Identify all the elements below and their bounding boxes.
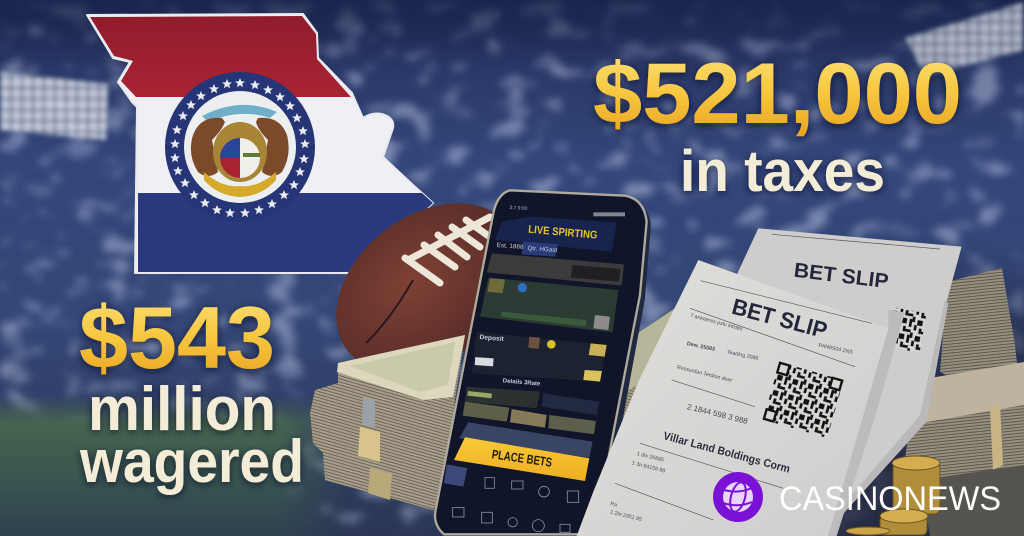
slip small text bbox=[610, 313, 854, 523]
place bets button bbox=[454, 437, 589, 481]
tabs: Est. 1888 bbox=[497, 242, 524, 251]
back QR code bbox=[887, 307, 927, 353]
amount: $543: $543 bbox=[79, 288, 275, 387]
slip small text: 1 dw 26895 bbox=[636, 451, 664, 464]
top bill bbox=[337, 335, 465, 400]
slip small text: Ra bbox=[610, 501, 618, 509]
smartphone bbox=[435, 190, 651, 534]
slip small text: PAN9S04 2NS bbox=[818, 343, 854, 356]
bet bar bbox=[459, 422, 593, 458]
app title: LIVE SPIRTING bbox=[528, 224, 598, 242]
eagle left bbox=[191, 118, 225, 176]
status bar bbox=[509, 205, 625, 216]
company name: Villar Land Boldings Corm bbox=[662, 430, 791, 476]
football bbox=[303, 168, 553, 408]
stadium light right bbox=[905, 2, 1024, 76]
eagle right bbox=[256, 118, 289, 176]
tabs: Qtr. HGast bbox=[527, 245, 558, 254]
place bets button: PLACE BETS bbox=[491, 447, 553, 470]
front bet slip bbox=[577, 260, 905, 536]
heading: back BET SLIP: BET SLIP bbox=[793, 259, 890, 293]
slip small text: Ressurdan Terdion deer bbox=[676, 364, 733, 384]
slip small text: Dew. 25083 bbox=[686, 341, 715, 353]
back bet slip bbox=[680, 228, 962, 536]
stadium light left bbox=[0, 72, 108, 140]
tabs bbox=[497, 242, 558, 257]
state seal bbox=[165, 72, 315, 222]
QR code bbox=[763, 362, 844, 438]
label: wagered: wagered bbox=[79, 428, 304, 495]
left stack of money bbox=[310, 335, 465, 510]
Missouri state flag map bbox=[87, 14, 438, 273]
ring of stars bbox=[170, 78, 310, 217]
crest gold band bbox=[213, 122, 267, 182]
seam bbox=[366, 280, 413, 343]
odds row bbox=[487, 253, 624, 286]
slip lines bbox=[615, 281, 872, 520]
label: in taxes: in taxes bbox=[680, 139, 885, 204]
heading: BET SLIP: BET SLIP bbox=[729, 293, 830, 343]
laces bbox=[405, 217, 490, 283]
slip small text: 1 2ln 2351 95 bbox=[610, 509, 642, 523]
status bar: 3:7 9:00 bbox=[509, 205, 528, 212]
slip small text: 2 1844 598 3 988 bbox=[686, 402, 749, 426]
helmet arc bbox=[202, 105, 277, 122]
featured match panel bbox=[480, 278, 618, 332]
bottom navigation bbox=[444, 464, 579, 532]
CasinoNews logo bbox=[713, 472, 1001, 522]
wordmark: CASINONEWS bbox=[779, 480, 1001, 518]
bundle straps bbox=[358, 427, 380, 462]
gold scroll bbox=[204, 172, 276, 197]
smartphone: Details 3Rate bbox=[502, 378, 541, 388]
grid panel bbox=[472, 332, 607, 382]
gold coin stacks bbox=[846, 456, 940, 535]
right-of-phone bills bbox=[620, 305, 690, 430]
olive buttons bbox=[463, 402, 509, 422]
label: million: million bbox=[88, 375, 276, 444]
slip small text: Teadlng 2089 bbox=[726, 349, 759, 362]
smartphone: Deposit bbox=[479, 334, 505, 343]
icon: purple globe bbox=[713, 472, 763, 522]
slip small text: 7 ankeeres pstv intrate bbox=[689, 313, 743, 333]
amount: $521,000: $521,000 bbox=[593, 46, 962, 142]
screen header band bbox=[495, 217, 617, 252]
slip small text: 1 3n 84158 88 bbox=[631, 460, 666, 475]
right stacks of money bbox=[900, 268, 1024, 536]
odds row two bbox=[465, 387, 540, 408]
